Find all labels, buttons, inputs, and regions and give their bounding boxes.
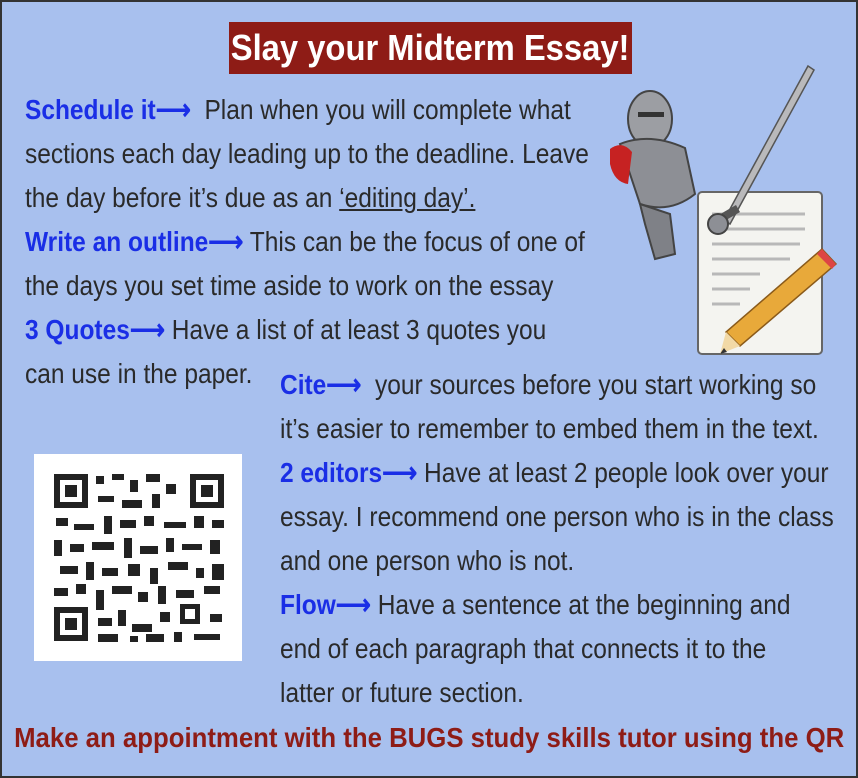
text block: left tips: sections each day leading up to the deadline. Leave	[25, 138, 589, 169]
text block: right tips: 2 editors⟶ Have at least 2 people look over your	[280, 457, 829, 488]
text block: right tips: and one person who is not.	[280, 545, 574, 576]
text block: right tips: essay. I recommend one person who is in the class	[280, 501, 834, 532]
icon: knight with sword and paper with pencil	[610, 64, 837, 355]
text block: left tips: the day before it’s due as an ‘editing day’.	[25, 182, 475, 213]
text block: left tips	[25, 94, 589, 389]
text block: left tips: the days you set time aside to work on the essay	[25, 270, 553, 301]
text block: left tips: Schedule it⟶ Plan when you will complete what	[25, 94, 571, 125]
text block: left tips: 3 Quotes⟶ Have a list of at least 3 quotes you	[25, 314, 546, 345]
QR code	[34, 454, 242, 661]
title: Slay your Midterm Essay!	[231, 27, 630, 68]
text block: right tips: Cite⟶ your sources before you start working so	[280, 369, 816, 400]
text block: left tips: Write an outline⟶ This can be the focus of one of	[25, 226, 585, 257]
footer call to action: Make an appointment with the BUGS study skills tutor using the QR	[14, 722, 844, 753]
text block: right tips: end of each paragraph that connects it to the	[280, 633, 766, 664]
text block: right tips	[280, 369, 834, 708]
text block: right tips: Flow⟶ Have a sentence at the beginning and	[280, 589, 790, 620]
text block: left tips: can use in the paper.	[25, 358, 252, 389]
text block: right tips: it’s easier to remember to embed them in the text.	[280, 413, 819, 444]
text block: right tips: latter or future section.	[280, 677, 524, 708]
